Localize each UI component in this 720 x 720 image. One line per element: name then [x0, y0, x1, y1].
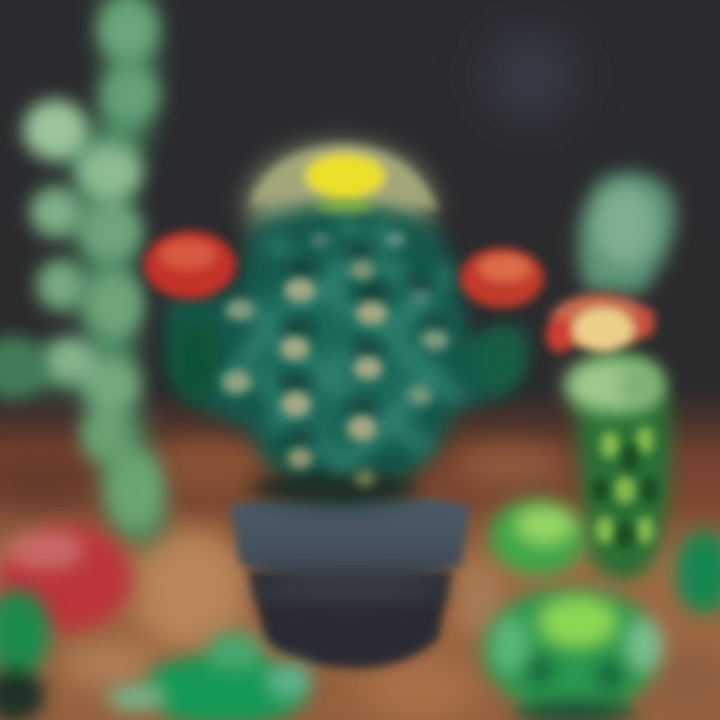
right flower — [546, 294, 655, 353]
green succulent bottom right large — [482, 588, 663, 720]
red fruit bottom left — [0, 524, 131, 632]
green succulent lower right small — [490, 499, 586, 575]
left beaded green cactus — [0, 0, 163, 530]
left red flower — [144, 231, 236, 299]
green succulent right edge — [676, 530, 720, 614]
spine shadows — [226, 238, 454, 450]
green succulent bottom left — [0, 590, 50, 720]
right cactus column — [564, 350, 672, 580]
main cactus body — [165, 145, 526, 504]
flowerpot — [230, 495, 470, 668]
cactus spines — [222, 232, 449, 487]
yellow flower on top — [250, 145, 438, 213]
right red flower — [460, 248, 544, 308]
cactus ridges — [225, 220, 460, 470]
green succulent bottom centre — [107, 632, 312, 720]
right pale cactus pad — [578, 172, 676, 295]
